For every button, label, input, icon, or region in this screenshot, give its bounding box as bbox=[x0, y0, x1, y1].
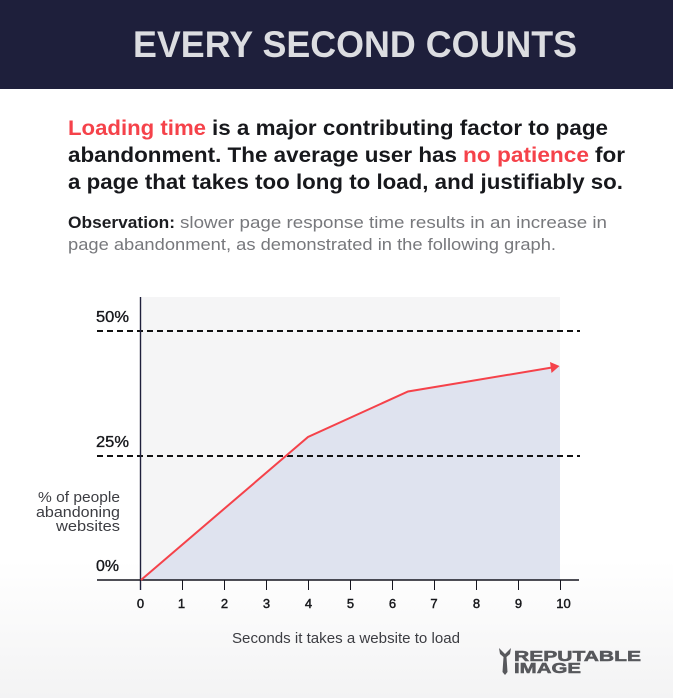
x axis labels: 6 bbox=[389, 596, 396, 611]
observation text bbox=[68, 214, 607, 254]
logo wordmark: REPUTABLE bbox=[514, 649, 641, 665]
x axis labels: 3 bbox=[263, 596, 270, 611]
intro paragraph: Loading time bbox=[68, 116, 206, 140]
area under curve bbox=[141, 366, 560, 580]
y axis bbox=[140, 297, 142, 590]
title banner bbox=[0, 0, 673, 89]
x axis ticks bbox=[182, 580, 560, 590]
observation text: page abandonment, as demonstrated in the following graph. bbox=[68, 236, 556, 254]
x axis bbox=[97, 579, 579, 581]
plot background bbox=[141, 297, 560, 580]
x axis labels: 8 bbox=[473, 596, 480, 611]
intro paragraph bbox=[68, 116, 626, 194]
y axis title bbox=[36, 489, 120, 535]
intro paragraph: for bbox=[595, 143, 626, 167]
line chart bbox=[36, 297, 580, 647]
y axis labels: 0% bbox=[96, 558, 119, 575]
x axis labels: 4 bbox=[305, 596, 312, 611]
gridline 50% bbox=[97, 330, 580, 332]
x axis title: Seconds it takes a website to load bbox=[232, 631, 460, 647]
x axis labels: 10 bbox=[556, 596, 571, 611]
x axis labels: 2 bbox=[221, 596, 228, 611]
x axis labels: 1 bbox=[178, 596, 185, 611]
gridline 25% bbox=[97, 455, 580, 457]
intro paragraph: no patience bbox=[463, 143, 589, 167]
y axis labels: 25% bbox=[96, 434, 129, 451]
intro paragraph: abandonment. The average user has bbox=[68, 143, 457, 167]
logo wordmark: IMAGE bbox=[514, 661, 581, 677]
logo bbox=[499, 648, 641, 677]
intro paragraph: is a major contributing factor to page bbox=[212, 116, 608, 140]
x axis labels: 7 bbox=[430, 596, 438, 611]
observation text: slower page response time results in an increase in bbox=[180, 214, 607, 232]
y axis title: websites bbox=[55, 518, 120, 535]
observation text: Observation: bbox=[68, 214, 175, 232]
y axis title: abandoning bbox=[36, 504, 120, 521]
x axis labels bbox=[137, 596, 571, 611]
y axis title: % of people bbox=[38, 489, 120, 506]
y axis labels: 50% bbox=[96, 309, 129, 326]
x axis labels: 5 bbox=[347, 596, 354, 611]
icon: necktie bbox=[499, 648, 511, 675]
x axis labels: 9 bbox=[515, 596, 522, 611]
red trend line with arrow bbox=[141, 362, 560, 580]
title: EVERY SECOND COUNTS bbox=[133, 24, 577, 65]
logo wordmark bbox=[514, 649, 641, 677]
y axis labels bbox=[96, 309, 129, 575]
x axis labels: 0 bbox=[137, 596, 144, 611]
intro paragraph: a page that takes too long to load, and justifiably so. bbox=[68, 170, 623, 194]
